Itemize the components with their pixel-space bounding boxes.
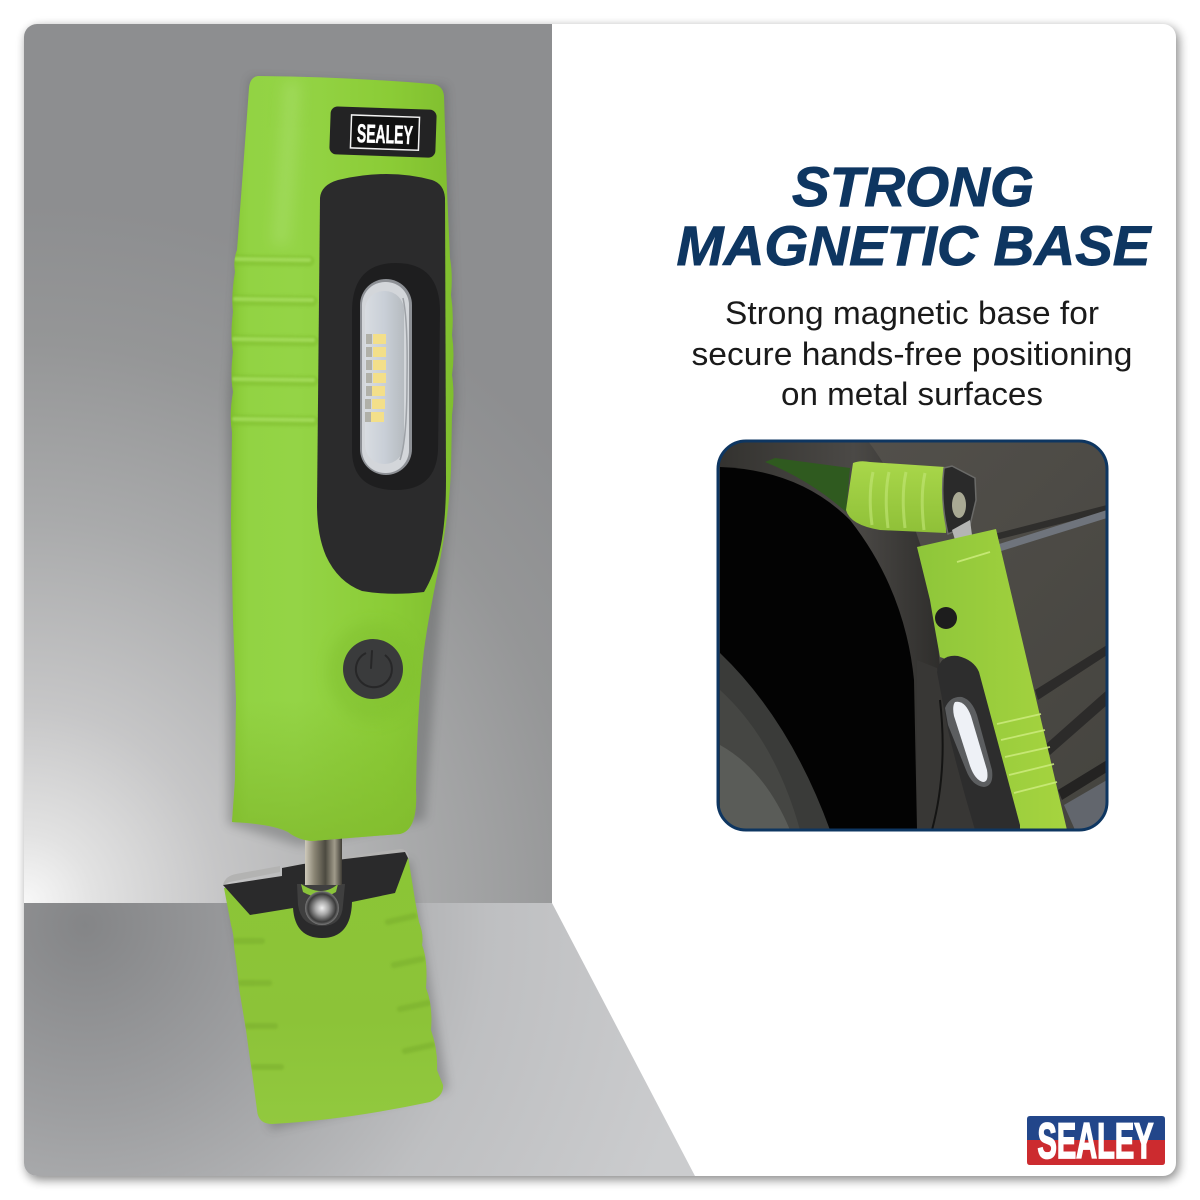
inset photo: lamp attached to vehicle arch (718, 441, 1107, 830)
heading (677, 166, 1152, 266)
product photo: green inspection lamp (215, 70, 460, 1130)
stem lower (305, 860, 342, 885)
base black insert (223, 852, 408, 938)
LED lens (360, 279, 412, 475)
floor (24, 903, 695, 1176)
hinged magnetic base shadow (266, 860, 450, 1132)
small lit LED lens (953, 702, 988, 782)
fender below lamp (936, 668, 974, 828)
SEALEY badge (329, 106, 437, 158)
steel ball joint (305, 891, 339, 925)
head LED glint (952, 492, 966, 518)
small black panel (937, 656, 1020, 830)
light recess (352, 263, 440, 490)
black light panel (317, 174, 446, 594)
base top strip (223, 849, 409, 885)
lamp body (917, 529, 1067, 830)
head ribs (870, 472, 925, 530)
lamp arm shadowed (765, 458, 850, 512)
base green shell (224, 858, 444, 1124)
power button (343, 639, 403, 699)
lamp body (225, 70, 460, 850)
backdrop panel: wall and floor (24, 24, 695, 1176)
heading: MAGNETIC BASE (676, 214, 1152, 277)
lamp drop shadow (228, 78, 456, 846)
description text: secure hands-free positioning (692, 336, 1132, 372)
magnetic base head (846, 461, 946, 533)
metal swivel stem (305, 838, 342, 855)
head black end cap (943, 466, 976, 534)
description text (692, 300, 1130, 406)
LED array (365, 334, 386, 422)
inset photo border (718, 441, 1107, 830)
tyre (720, 653, 830, 830)
vehicle panel background (869, 442, 1106, 828)
heading: STRONG (792, 155, 1034, 218)
description text: Strong magnetic base for (725, 295, 1099, 331)
button dimple (336, 641, 366, 704)
small power button (935, 607, 957, 629)
wheel arch lip (718, 441, 945, 830)
base grip ribs (235, 916, 432, 1067)
wall (24, 24, 552, 904)
body grip ribs (234, 259, 313, 421)
black wheel arch (720, 467, 917, 830)
small lens surround (945, 697, 992, 787)
hinged magnetic base (223, 849, 444, 1124)
swivel stem (952, 520, 972, 540)
green ball socket (297, 884, 345, 926)
small lamp ribs (957, 552, 1057, 793)
description text: on metal surfaces (781, 376, 1043, 412)
SEALEY badge: SEALEY (356, 118, 413, 150)
